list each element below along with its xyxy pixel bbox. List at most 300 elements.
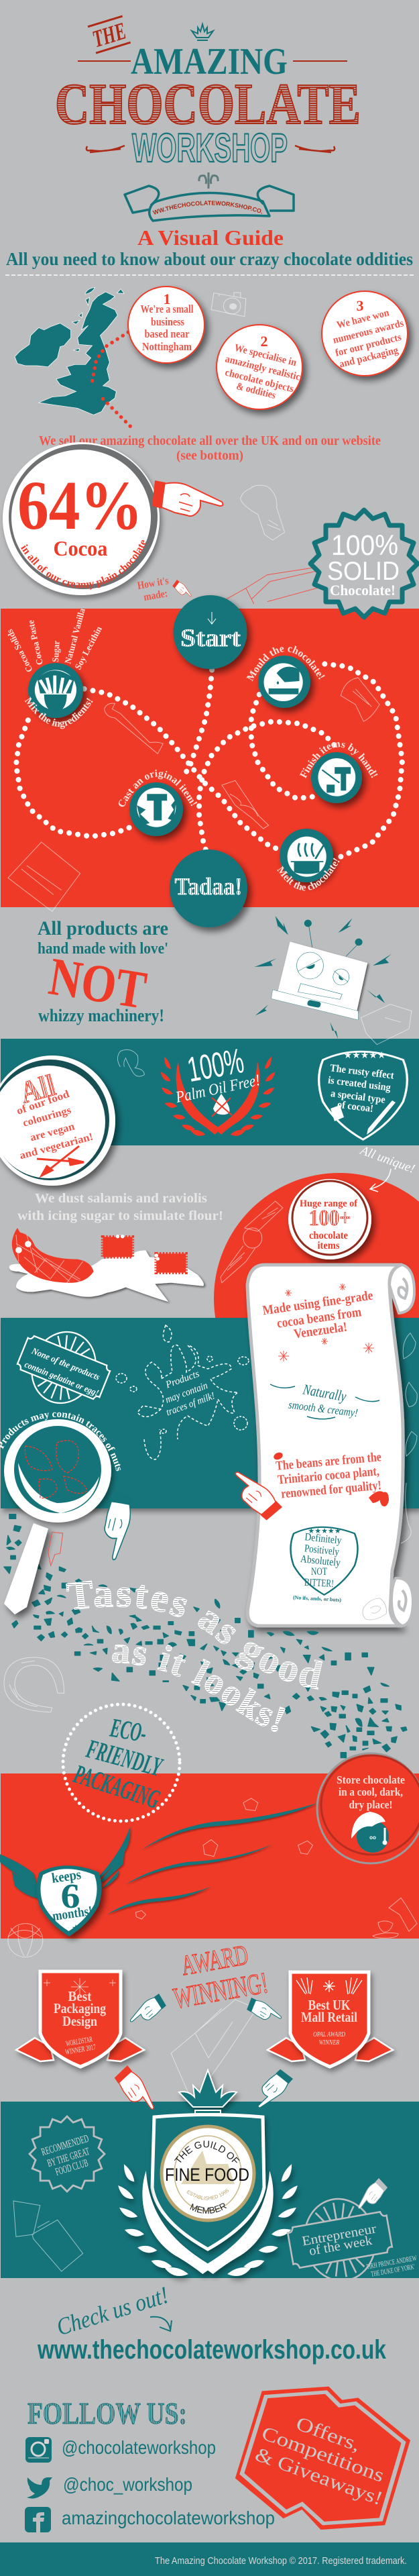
splat text: Products	[164, 1368, 201, 1391]
scroll text: trinitario: The beans are from the	[275, 1450, 382, 1474]
swoosh bottom	[107, 1887, 211, 1914]
stamp text: of the week	[308, 2233, 373, 2259]
flourishes: workshop	[86, 146, 335, 152]
award subtext: WORLDSTAR	[65, 2036, 93, 2048]
label: cast an original item: Cast an original item!	[118, 769, 197, 807]
salami netting	[16, 1235, 83, 1283]
shield text: Positively	[304, 1543, 340, 1558]
dotted route: nottingham	[93, 332, 128, 381]
seal outline	[29, 2116, 105, 2192]
award text: Best	[68, 1988, 91, 2004]
bubble 3 text: We have won	[335, 307, 391, 331]
badge outer ring	[3, 442, 160, 595]
ravioli 1	[103, 1237, 132, 1257]
heading: follow us: FOLLOW US:	[27, 2396, 187, 2430]
scroll text: cocoa beans: Venezuela!	[293, 1320, 348, 1341]
handle: twitter: @choc_workshop	[63, 2474, 192, 2495]
flourish: amazing lines	[78, 60, 347, 62]
step: cast	[129, 782, 183, 836]
scroll text: trinitario	[275, 1450, 382, 1501]
shield text: is created using	[327, 1074, 392, 1094]
months text: months!	[52, 1904, 93, 1924]
sketch: cheese grater	[361, 1004, 412, 1045]
eco text	[70, 1712, 166, 1814]
store text: Store chocolate	[337, 1773, 405, 1786]
bubble 3 text: and packaging	[338, 344, 400, 370]
text lines: Huge range of	[300, 1198, 358, 1209]
bubble 2	[217, 325, 302, 409]
word: all: All	[17, 1068, 59, 1110]
scroll text: naturally: Naturally	[301, 1380, 348, 1405]
scroll text: trinitario: renowned for quality!	[280, 1479, 382, 1501]
offers text: Offers,	[293, 2413, 363, 2456]
icon: paint pot and brush	[331, 1100, 396, 1135]
bubble 3 text: 3	[357, 297, 363, 314]
band: teal palm oil	[1, 1039, 419, 1145]
path: mould to finish	[251, 694, 316, 798]
logo word: chocolate: CHOCOLATE	[55, 71, 361, 136]
bubble 2 text	[224, 333, 302, 401]
sketch: spool	[341, 678, 379, 721]
logo word: the	[88, 16, 131, 53]
band: teal allergens	[1, 1318, 419, 1508]
shield teal	[36, 1865, 102, 1937]
shield stars: ★★★★★	[308, 1527, 341, 1535]
text lines: chocolate	[309, 1230, 348, 1241]
sketch: red tongs	[222, 567, 324, 604]
ravioli faces	[116, 1235, 160, 1261]
ribbon tails	[16, 2038, 144, 2061]
shield: rusty effect	[319, 1051, 407, 1139]
ribbon tails	[267, 2038, 393, 2061]
inner disc	[0, 1066, 105, 1178]
crest shield	[152, 2115, 264, 2249]
label: how it's made	[137, 575, 170, 603]
store text: in a cool, dark,	[339, 1786, 403, 1798]
scroll text: cocoa beans: Made using fine-grade	[261, 1288, 374, 1318]
icon: hand pointing down	[105, 1492, 132, 1559]
icon: bowl	[35, 670, 76, 711]
arrow: all unique	[370, 1169, 391, 1192]
badge: keeps 6 months	[0, 1826, 130, 1937]
bubble 1 text: We're a small	[141, 303, 194, 315]
finish circle	[311, 752, 362, 803]
red disc: huge range	[214, 1173, 419, 1424]
text: palm oil free: Palm Oil Free!	[174, 1072, 262, 1106]
splat text	[164, 1368, 217, 1418]
established: ESTABLISHED 1995	[186, 2189, 229, 2200]
salami	[12, 1228, 94, 1283]
award text	[301, 1997, 357, 2025]
melt circle	[280, 829, 333, 882]
word: winning: WINNING!	[171, 1966, 270, 2015]
sketch: pencil red	[48, 1532, 63, 1565]
stamp text: None of the products	[29, 1345, 101, 1382]
bottom roll	[392, 1578, 413, 1626]
badge: palm oil free	[160, 1041, 276, 1136]
dark ring	[0, 1060, 109, 1180]
shield text	[327, 1062, 395, 1115]
star: ★	[72, 1924, 80, 1934]
shield: not bitter	[291, 1527, 357, 1595]
sketch: watch	[221, 1201, 283, 1283]
offers text	[252, 2413, 387, 2510]
red ring	[292, 1181, 367, 1255]
logo word: amazing: AMAZING	[131, 41, 288, 83]
bubble 2 text: amazingly realistic	[224, 353, 302, 383]
icon: pot	[288, 837, 326, 877]
splat text: traces of milk!	[165, 1390, 217, 1418]
swoosh middle	[125, 1844, 273, 1884]
sketch: wrench	[104, 703, 163, 754]
shield text: Definitely	[304, 1531, 342, 1547]
number 6: 6	[60, 1877, 80, 1916]
dotted ring	[63, 1704, 180, 1821]
guild inner ring	[174, 2136, 241, 2211]
banner: url ribbon	[125, 186, 294, 221]
path: finish to tadaa	[199, 721, 334, 850]
award: best uk mall retail	[267, 1972, 393, 2067]
award subtext	[313, 2030, 345, 2047]
scroll flourishes	[270, 1384, 379, 1419]
map: great britain	[39, 292, 117, 415]
band: red packaging	[1, 1773, 419, 1939]
ingredient: sugar: Sugar	[50, 640, 62, 662]
award text	[54, 1988, 106, 2029]
step: start	[173, 595, 247, 669]
path: start to cast	[184, 670, 212, 775]
ingredient: soy lecithin: Soy Lecithin	[72, 624, 104, 671]
band: footer	[0, 2542, 419, 2576]
text: we dust salamis	[17, 1191, 223, 1223]
store text: dry place!	[349, 1798, 393, 1811]
band: red process	[1, 609, 419, 907]
map: ireland	[15, 323, 71, 367]
tadaa circle	[170, 849, 247, 927]
stamp drawing	[9, 1317, 118, 1418]
ingredient: cocoa solids: Cocoa Solids	[5, 627, 35, 674]
ingredient labels	[5, 607, 104, 674]
step: mix ingredients	[28, 663, 83, 718]
icon: hand entrepreneur	[351, 2177, 391, 2213]
heading: award winning	[171, 1940, 270, 2015]
text lines: colourings	[21, 1104, 72, 1129]
handle: facebook: amazingchocolateworkshop	[62, 2508, 275, 2528]
path: melt to mould	[318, 663, 402, 857]
sketch: lighter	[13, 2201, 83, 2271]
award subtext: WINNER	[319, 2039, 340, 2047]
bubble 2 text: We specialise in	[233, 342, 298, 368]
bubble 2 text: 2	[260, 333, 268, 350]
band: teal awards	[1, 2102, 419, 2278]
seal text: BY THE GREAT	[46, 2146, 91, 2169]
label: cocoa: Cocoa	[54, 536, 107, 560]
sketch: light bulb	[241, 485, 285, 540]
scroll text: cocoa beans	[261, 1288, 374, 1341]
icon: hand right award	[245, 1997, 284, 2024]
outer disc	[0, 1055, 115, 1186]
inner dark ring	[321, 1755, 419, 1855]
icon: instagram	[25, 2437, 52, 2463]
icon: hand red to guild	[110, 2064, 164, 2115]
start label: Start	[180, 625, 241, 652]
magnifying glass: nuts	[0, 1412, 121, 1621]
award subtext: WINNER 2017	[64, 2043, 97, 2057]
shield text	[300, 1531, 342, 1590]
icon: hand pointing to bean text	[228, 1462, 284, 1525]
scroll text: trinitario: Trinitario cocoa plant,	[277, 1464, 380, 1488]
cast circle	[129, 782, 183, 836]
label: how it's made: made:	[143, 588, 168, 603]
mix circle	[28, 663, 83, 718]
bubble 1 text	[141, 291, 194, 353]
sketch: bottle	[222, 780, 269, 829]
icon: jug and mould	[264, 663, 303, 701]
logo word: the: THE	[89, 17, 129, 52]
dotted route: website	[103, 399, 132, 428]
keeps text: keeps	[50, 1866, 82, 1886]
badge: 64 percent cocoa	[1, 442, 165, 601]
award text: Packaging	[54, 2000, 106, 2016]
mould circle	[258, 656, 310, 708]
label: finish items by hand: Finish items by hand!	[299, 742, 378, 778]
antennae	[308, 925, 358, 956]
swoosh top	[141, 1803, 318, 1850]
reels	[297, 952, 349, 999]
outer ring	[317, 1753, 419, 1863]
splat text: may contain	[164, 1380, 209, 1406]
seal text: 100%	[331, 529, 398, 562]
stamp: gelatine	[9, 1317, 118, 1418]
ingredient: natural vanilla: Natural Vanilla	[62, 607, 87, 665]
text lines: items	[318, 1240, 339, 1251]
line 2: with icing sugar to simulate flour!	[17, 1208, 223, 1223]
step: tadaa	[170, 849, 247, 927]
path: mix to cast	[16, 720, 132, 837]
text lines: and vegetarian!	[18, 1131, 95, 1162]
map: uk and ireland	[15, 287, 132, 428]
badge: huge range	[288, 1179, 371, 1259]
icon: crossed brushes	[37, 1146, 84, 1176]
text: see bottom: (see bottom)	[176, 448, 243, 463]
icon: egg thermometer	[351, 1812, 389, 1853]
label: how it's made: How it's	[137, 575, 170, 592]
bubble 1 text: based near	[145, 327, 189, 340]
scroll text: smooth: smooth & creamy!	[288, 1398, 359, 1419]
seal outline	[310, 510, 418, 617]
shield white	[40, 1869, 97, 1931]
icon: beans bottom	[369, 1491, 389, 1506]
badge inner disc	[11, 450, 151, 585]
guild top text: THE GUILD OF	[174, 2141, 240, 2163]
machine body	[278, 941, 367, 1011]
member: MEMBER	[190, 2203, 227, 2214]
eco text: FRIENDLY	[83, 1733, 166, 1782]
badge: offers	[235, 2387, 410, 2530]
start arrow	[208, 612, 216, 624]
sparkles	[44, 1978, 116, 1996]
shield text: NOT	[311, 1566, 327, 1578]
crest crown	[179, 2070, 237, 2114]
heading: a visual guide: A Visual Guide	[137, 225, 284, 250]
offers text: & Giveaways!	[252, 2444, 385, 2510]
slogan line 1: Tastes as good	[66, 1581, 323, 1690]
crest laurel	[118, 2164, 298, 2276]
stamp text: contain gelatine or egg!	[23, 1359, 101, 1398]
label: mix the ingredients: Mix the ingredients!	[24, 697, 93, 729]
line 3: whizzy machinery!	[38, 1006, 164, 1025]
award subtext	[64, 2036, 97, 2057]
icon: crossed drop	[213, 1094, 229, 1115]
offers stamp	[235, 2387, 410, 2530]
award: best packaging	[16, 1971, 144, 2067]
path: mix to melt	[84, 689, 280, 850]
sketch: horseshoe	[4, 1657, 64, 1712]
shield text: BITTER!	[304, 1577, 334, 1590]
icon: crown	[192, 24, 213, 40]
scroll sheet	[247, 1265, 403, 1626]
stamp text	[301, 2221, 377, 2259]
curved label: in all of our creamy plain chocolate	[20, 540, 146, 590]
word: award: AWARD	[179, 1940, 251, 1981]
swooshes	[107, 1803, 318, 1914]
text lines	[15, 1088, 95, 1162]
ingredient: cocoa paste: Cocoa Paste	[25, 619, 45, 666]
bubble 3 text: numerous awards	[332, 317, 405, 346]
text: all unique: All unique!	[357, 1143, 417, 1176]
eco text: ECO-	[108, 1712, 149, 1748]
salami face	[15, 1241, 32, 1253]
lens	[14, 1426, 101, 1513]
wings	[0, 1826, 130, 1899]
sketches: right edge shells	[401, 1333, 417, 1543]
sketch: phone	[8, 842, 80, 911]
bubble 3	[322, 291, 408, 376]
almonds dashed	[25, 1441, 87, 1498]
icon: egg thermometer: oo	[369, 1835, 376, 1841]
illustration: machine robot	[255, 916, 392, 1039]
sketch: diamond	[171, 2000, 257, 2102]
bubble 1 text: 1	[164, 291, 170, 307]
laurel red	[160, 1057, 276, 1136]
icon: cast mould	[137, 788, 176, 827]
ravioli 2	[156, 1253, 186, 1273]
roundel: eco friendly packaging	[63, 1704, 180, 1821]
bubble 2 text: & oddities	[235, 380, 277, 401]
icon: pointing hand red	[152, 480, 223, 516]
stamp text: Entrepreneur	[301, 2221, 377, 2249]
badge: all food colourings	[0, 1055, 115, 1186]
sketches: diced chocolate	[8, 1798, 417, 1957]
badge shadow ring	[9, 444, 158, 589]
label: mould the chocolate: Mould the chocolate!	[247, 646, 325, 682]
guild logo disc	[162, 2126, 254, 2220]
start circle	[173, 595, 247, 669]
bubble 1 text: business	[151, 315, 184, 328]
icon: beans top	[273, 1451, 284, 1461]
scroll text: cocoa beans: cocoa beans from	[276, 1304, 363, 1331]
lens highlight	[18, 1463, 99, 1513]
machine base	[272, 990, 358, 1020]
small print: (No ifs, ands, or buts)	[293, 1594, 342, 1603]
shield	[290, 1972, 369, 2067]
icon: hand left award	[125, 1993, 168, 2027]
seal text: FOOD CLUB	[54, 2157, 90, 2178]
scroll sparkles	[278, 1284, 374, 1361]
text lines: of our food	[15, 1088, 71, 1117]
illustration: dusted salami and ravioli	[9, 1228, 204, 1302]
award text: Best UK	[308, 1997, 351, 2013]
award subtext: OPAL AWARD	[313, 2030, 345, 2039]
word: not: NOT	[45, 947, 150, 1021]
icon: fleur	[199, 172, 218, 189]
text lines: 100+	[308, 1206, 351, 1231]
dotted process paths	[8, 663, 402, 911]
offers text: Competitions	[259, 2422, 387, 2487]
slogan line 2: as it looks!	[112, 1645, 286, 1733]
splat outline	[137, 1325, 238, 1459]
shield text: of cocoa!	[337, 1099, 374, 1115]
scroll: cocoa facts	[247, 1265, 414, 1626]
shield text: a special type	[330, 1088, 386, 1106]
top roll	[390, 1265, 414, 1313]
bubble 3 text: for our products	[334, 331, 402, 359]
outer ring	[288, 1179, 371, 1259]
step: mould	[258, 656, 310, 708]
seal: recommended	[29, 2116, 105, 2192]
handle	[4, 1523, 48, 1614]
cross	[212, 1098, 232, 1117]
logo word: workshop: WORKSHOP	[132, 125, 288, 170]
line 1: We dust salamis and raviolis	[35, 1191, 207, 1206]
ring	[4, 1419, 111, 1523]
stamp text	[23, 1345, 101, 1398]
base buttons	[307, 1000, 321, 1008]
label: melt the chocolate: Melt the chocolate!	[277, 858, 339, 891]
flour splat	[9, 1250, 204, 1302]
text: all products are hand made	[38, 917, 168, 1025]
antenna tips	[304, 920, 363, 945]
step: finish	[311, 752, 362, 803]
dashed milk splat	[116, 1325, 249, 1459]
shield	[40, 1971, 121, 2067]
seal text: RECOMMENDED	[40, 2133, 91, 2158]
text: 100%: 100%	[184, 1041, 247, 1090]
badge: store chocolate	[317, 1753, 419, 1863]
guild illustration	[181, 2151, 235, 2184]
splat drops	[116, 1356, 249, 1433]
arrow: check us out	[150, 2317, 172, 2331]
icon: hand teal to guild	[252, 2066, 294, 2115]
icon: twitter	[27, 2477, 52, 2499]
confetti: chocolate shards	[4, 1514, 407, 1758]
eco text: PACKAGING	[70, 1758, 164, 1814]
shield stars: ★★★★★	[344, 1051, 385, 1061]
divider	[5, 274, 416, 276]
bolts	[255, 916, 392, 1039]
seal text: Chocolate!	[330, 582, 396, 599]
value: 64%: 64%	[17, 467, 143, 544]
sketch: camera	[211, 293, 246, 317]
bubble 2 text: chocolate objects	[224, 367, 295, 395]
line 2: hand made with love'	[38, 940, 168, 958]
shield text: Absolutely	[300, 1553, 341, 1569]
award text: Mall Retail	[301, 2009, 357, 2025]
icon: facebook	[25, 2507, 51, 2532]
ornaments	[296, 1977, 362, 1994]
seal text	[327, 529, 400, 599]
handle: instagram: @chocolateworkshop	[62, 2437, 216, 2458]
